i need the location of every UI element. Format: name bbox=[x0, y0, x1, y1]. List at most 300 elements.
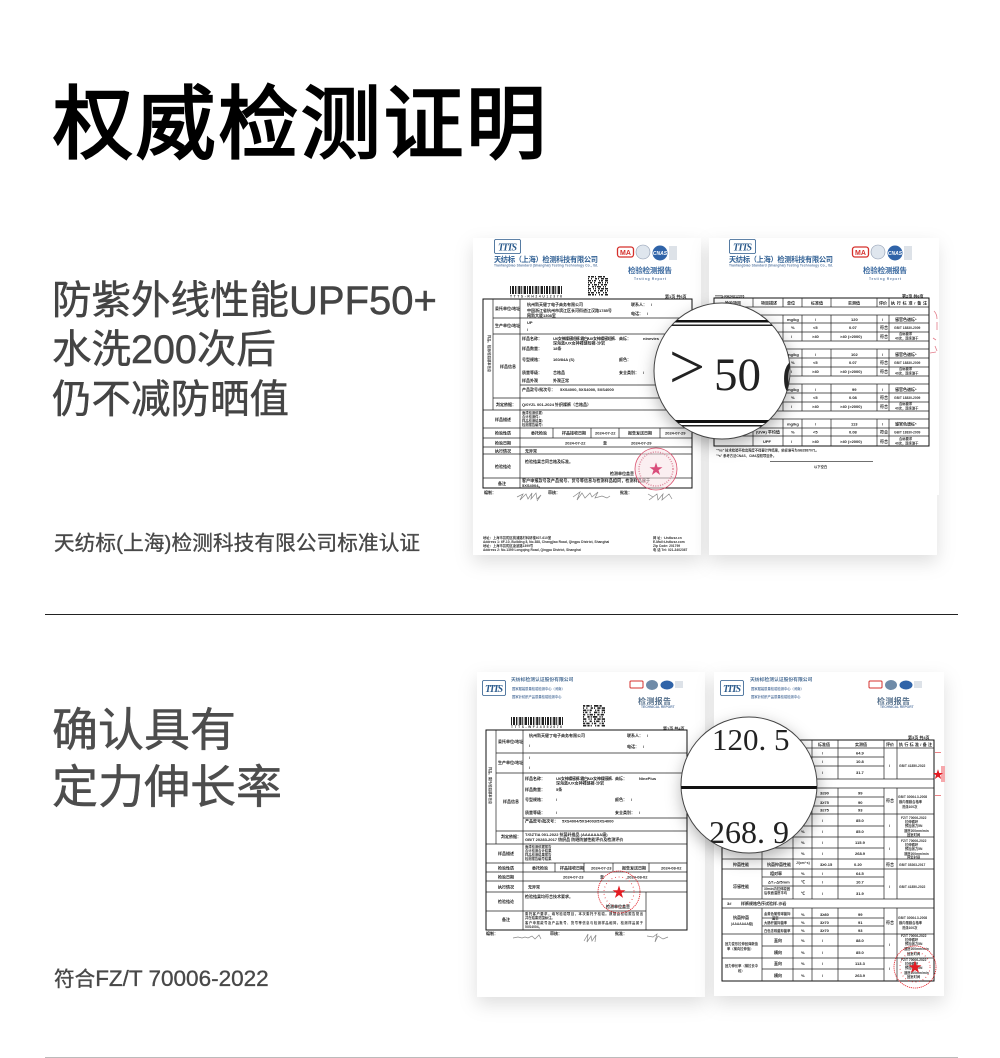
results table: 90 bbox=[858, 800, 863, 805]
results table: 感官色谱标* bbox=[895, 386, 917, 392]
report table: 检验日期 bbox=[495, 440, 511, 446]
address footer: 地址：上海市普陀区桃浦路村科研楼607-610室 bbox=[483, 535, 552, 540]
results table: 抗菌抑菌性能 bbox=[767, 861, 791, 867]
results table: FZ/T 70006-2022 bbox=[901, 934, 927, 938]
results table: <5 bbox=[813, 395, 818, 400]
results table: 直向 bbox=[774, 960, 782, 966]
results table: 3≥90 bbox=[820, 790, 830, 796]
results table: 3≥80 bbox=[820, 912, 830, 917]
report table: 执行情况 bbox=[498, 884, 514, 890]
results table bbox=[714, 298, 929, 446]
results table: / bbox=[815, 387, 817, 392]
results table: 金黄色葡萄球菌抑 bbox=[764, 911, 791, 916]
results table: 120 bbox=[851, 317, 858, 322]
report table: 判定依据： bbox=[501, 833, 521, 839]
results table: 回复时间 bbox=[907, 951, 921, 956]
report table: 样品名称： bbox=[525, 775, 545, 781]
report table: 2024-07-22 bbox=[565, 440, 586, 446]
report table: 联系人： / bbox=[627, 732, 649, 738]
address footer: Address 1: 6F-10, Building 8, No.388, Changjiao Road, Qingpu District, Shanghai bbox=[483, 540, 609, 544]
report table: / bbox=[529, 765, 531, 770]
results table: 99 bbox=[852, 387, 857, 392]
results table: >40 bbox=[812, 439, 820, 444]
report table: 质量等级： bbox=[525, 809, 545, 815]
signatures: 编制： bbox=[484, 489, 496, 495]
report table: ninevies bbox=[643, 336, 660, 341]
results table: 合标要求 bbox=[899, 331, 913, 336]
report heading bbox=[638, 696, 675, 709]
results table bbox=[722, 740, 934, 981]
results table: / bbox=[822, 829, 824, 834]
magnifier: UPF value bbox=[650, 303, 800, 439]
section 1: UV protection bbox=[52, 238, 939, 555]
report table: 5XS4004。 bbox=[525, 925, 542, 929]
results table: % bbox=[801, 928, 805, 933]
signatures: 批准： bbox=[615, 930, 627, 936]
results table: 实测值 bbox=[855, 741, 867, 747]
results table: 感官色谱标* bbox=[895, 420, 917, 426]
report table: 备注 bbox=[502, 916, 510, 922]
results table: 速度200mm/min bbox=[904, 946, 929, 951]
report table: 委托检验 bbox=[532, 864, 548, 870]
results table: 符合 bbox=[880, 403, 888, 409]
report table: 2024-07-29 bbox=[665, 430, 686, 436]
results table: 预加张力5N bbox=[905, 941, 923, 946]
results table: 3≥75 bbox=[820, 808, 830, 812]
results table: 样裤规格色序试验样-沙岩 bbox=[741, 900, 786, 906]
partial stamp bbox=[930, 311, 937, 353]
report table: 样品接收日期 bbox=[562, 430, 586, 436]
table footnotes: 以下空白 bbox=[814, 464, 827, 469]
results table: 合标要求 bbox=[899, 436, 913, 441]
report table: 备注 bbox=[498, 480, 506, 486]
stamp bbox=[635, 448, 677, 490]
report heading: 检验检测报告 bbox=[628, 265, 672, 275]
report table: 网新大厦1308室 bbox=[527, 312, 556, 318]
results table: 回力变形拉伸回弹数值 bbox=[725, 941, 759, 946]
report table: 质量等级： bbox=[522, 369, 542, 375]
results table: / bbox=[815, 352, 817, 357]
title: 权威检测证明 bbox=[53, 80, 546, 169]
panel: report page 4 bbox=[714, 672, 945, 996]
panel: report page 2: TTTS-RH24U12376 bbox=[715, 294, 744, 298]
address footer bbox=[483, 535, 688, 552]
report table: 18条 bbox=[553, 345, 561, 351]
results table: 93 bbox=[858, 808, 863, 812]
report table: GB/T 20283-2017 纺织品 防晒防皱性能评价及检测评价 bbox=[525, 836, 623, 842]
company name bbox=[511, 676, 574, 699]
report table: 检测报告编号结果 bbox=[525, 856, 552, 861]
results table: 符合 bbox=[886, 861, 894, 867]
report heading: Testing Report bbox=[869, 277, 902, 281]
results table: 抑菌性能 bbox=[733, 861, 749, 867]
results table: / bbox=[822, 750, 824, 756]
results table: % bbox=[801, 973, 805, 978]
report table: 面漆检测依据： bbox=[522, 410, 545, 415]
results table: FZ/T 70006-2022 bbox=[901, 958, 927, 962]
results table: % bbox=[801, 961, 805, 966]
results table: GB/T 41850-2022 bbox=[899, 885, 926, 889]
results table: / bbox=[882, 317, 884, 322]
text block: UPF50+ claim: 防紫外线性能UPF50+ bbox=[52, 279, 437, 323]
results table: 31.9 bbox=[856, 891, 865, 896]
report table: 颜色： bbox=[619, 356, 631, 362]
results table: 拉伸循环 bbox=[905, 937, 919, 942]
report table: 检验结果合同合格及标准。 bbox=[525, 458, 573, 464]
results table: 0.07 bbox=[849, 360, 858, 365]
report table: 检验日期 bbox=[498, 874, 514, 880]
address footer: Zip Code: 201799 bbox=[653, 544, 680, 548]
results table: 64.5 bbox=[856, 871, 865, 876]
results table: % bbox=[801, 851, 805, 856]
results table: / bbox=[822, 880, 824, 884]
report table: UP bbox=[527, 320, 533, 325]
report table: 2024-07-22 bbox=[595, 430, 616, 436]
report table: 2024-07-23 bbox=[591, 866, 612, 870]
results table: 85.0 bbox=[856, 950, 865, 955]
results table: 符合 bbox=[880, 368, 888, 374]
results table: GB/T 30064.3-2008 bbox=[898, 916, 927, 920]
stamp: ★ bbox=[649, 461, 663, 477]
accreditation logos: MA bbox=[855, 250, 866, 257]
results table: / bbox=[882, 387, 884, 392]
results table: % bbox=[791, 360, 795, 365]
company name bbox=[750, 676, 813, 699]
report table: 样品检测结果： bbox=[522, 418, 545, 423]
report table: 商标： bbox=[615, 775, 627, 781]
results table: >40 (>2000) bbox=[840, 404, 862, 409]
results table: / bbox=[889, 763, 891, 768]
results table: 113 bbox=[851, 422, 858, 426]
results table: / bbox=[822, 973, 824, 978]
magnifier: elongation values bbox=[680, 717, 820, 853]
section 2: stretch recovery bbox=[52, 672, 945, 997]
report table: 产品款号/批次号： bbox=[522, 386, 555, 392]
results table: % bbox=[791, 395, 795, 400]
report table: 样品、委托/检验基本信息 bbox=[488, 767, 493, 805]
company name: Tianfangbiao Standard (Shanghai) Testing Technology Co., ltd. bbox=[729, 264, 833, 268]
report table: / bbox=[527, 327, 529, 332]
results table: 回复时间 bbox=[907, 832, 921, 837]
results table: % bbox=[801, 950, 805, 955]
results table: mg/kg bbox=[787, 387, 799, 392]
report table: 合计检测合计结果 bbox=[525, 848, 552, 853]
results table: ΔT₁-Δ/5mm bbox=[768, 880, 790, 884]
results table: 段） bbox=[738, 968, 745, 973]
results table: GB/T 30064.3-2008 bbox=[898, 795, 927, 799]
results table: ℃ bbox=[801, 891, 805, 896]
results table: 评价 bbox=[879, 300, 887, 306]
report heading bbox=[628, 265, 672, 281]
results table: 感官色谱标* bbox=[895, 316, 917, 322]
barcode: TTTS-RH24U12376 bbox=[510, 294, 562, 298]
results table: 标准值 bbox=[811, 300, 823, 306]
results table: / bbox=[815, 422, 817, 426]
report table: 安全类别： / bbox=[619, 369, 645, 375]
company name: Tianfangbiao Standard (Shanghai) Testing Technology Co., ltd. bbox=[494, 264, 598, 268]
results table: / bbox=[822, 851, 824, 856]
divider bbox=[45, 614, 958, 615]
results table: / bbox=[822, 840, 824, 845]
report table bbox=[483, 299, 692, 488]
partial stamp: ★ bbox=[932, 769, 944, 781]
results table: 0.20 bbox=[854, 862, 863, 867]
report table: / bbox=[529, 755, 531, 760]
results table: FZ/T 70006-2022 bbox=[901, 816, 927, 820]
results table: 项目描述 bbox=[761, 300, 777, 306]
report table: 2024-08-02 bbox=[661, 866, 682, 870]
signatures: 批准： bbox=[620, 489, 632, 495]
results table: / bbox=[822, 818, 824, 823]
results table: 直向 bbox=[774, 937, 782, 943]
report table: / bbox=[529, 743, 531, 748]
results table: 合标要求 bbox=[899, 366, 913, 371]
report table: 杭州新天健丁电子商务有限公司 bbox=[527, 301, 583, 307]
address footer: E-Mail:t-tstbzzz.com bbox=[653, 540, 685, 544]
results table: 速度200mm/min bbox=[904, 970, 929, 975]
results table: / bbox=[822, 871, 824, 876]
accreditation logos: MA bbox=[620, 250, 631, 257]
signatures: 审核： bbox=[550, 930, 562, 936]
results table: 执行标准/备注 bbox=[891, 300, 927, 306]
panel: report page 4: 第3页 共4页 bbox=[908, 734, 930, 740]
address footer: Address 2: No.1399 Longqing Road, Qingpu District, Shanghai bbox=[483, 548, 581, 552]
stamp: ★ bbox=[612, 884, 626, 900]
address footer: 网 址：t-tstbzzz.cn bbox=[653, 535, 682, 540]
results table: 回复时间 bbox=[907, 974, 921, 979]
logo: TTTS: TTTS bbox=[485, 684, 503, 695]
report table: 2024-07-23 bbox=[563, 874, 584, 880]
results table: 3≥0.15 bbox=[820, 862, 833, 867]
results table: 3≥75 bbox=[820, 800, 830, 805]
results table: (UVA) 平均值 bbox=[756, 428, 780, 434]
report table: 委托客户要求，填写检验项目，本次委托于检验。数据由检验报告提出 bbox=[525, 911, 643, 916]
results table: 符合 bbox=[886, 797, 894, 803]
report table: 5XS4000, 5XS4000, 5XS4000 bbox=[560, 387, 615, 392]
results table: 抗菌抑菌 bbox=[733, 914, 749, 920]
report table: / bbox=[556, 797, 558, 802]
results table: % bbox=[801, 840, 805, 845]
certification note: 天纺标(上海)检测科技有限公司标准认证 bbox=[54, 532, 420, 555]
report table: 生产单位/地址 bbox=[498, 759, 523, 765]
results table: 洗涤100次 bbox=[902, 925, 918, 930]
results table: 预加张力5N bbox=[905, 965, 923, 970]
report table: 安全类别： / bbox=[615, 809, 641, 815]
company name: 天纺标检测认证股份有限公司 bbox=[750, 676, 813, 683]
results table: 回复时间 bbox=[907, 854, 921, 860]
report table: 2024-07-29 bbox=[631, 440, 652, 446]
report table: 5XS4004。 bbox=[522, 483, 542, 488]
results table: UPF bbox=[763, 439, 772, 444]
results table: 40次，连续测干 bbox=[895, 406, 919, 410]
results table: >40 bbox=[812, 369, 820, 374]
results table: 0.08 bbox=[849, 395, 858, 400]
panel: report page 3: 第1页 共4页 bbox=[663, 725, 685, 731]
results table: 符合 bbox=[880, 394, 888, 400]
report heading: 检测报告 bbox=[877, 696, 910, 706]
company name: 天纺标检测认证股份有限公司 bbox=[511, 676, 574, 683]
magnifier: UPF value: > bbox=[669, 331, 705, 402]
report table: 无异常 bbox=[528, 884, 540, 890]
results table: / bbox=[822, 938, 824, 943]
report table: / bbox=[556, 810, 558, 815]
logo: TTTS bbox=[720, 680, 744, 696]
text block: UPF50+ claim: 仍不减防晒值 bbox=[52, 378, 289, 422]
report table: 报告发送日期 bbox=[628, 430, 652, 436]
report table: 深海蓝/UX女神裸感短裤-沙岩 bbox=[553, 340, 605, 346]
results table: 实测值 bbox=[848, 300, 860, 306]
results table: 合标要求 bbox=[899, 401, 913, 406]
results table: / bbox=[822, 891, 824, 896]
results table: 菌率 bbox=[772, 916, 779, 920]
results table: % bbox=[791, 430, 795, 434]
report heading: TECHNICAL REPORT bbox=[641, 705, 675, 709]
report table: 样品检测结果报告 bbox=[525, 852, 552, 857]
results table: / bbox=[889, 823, 891, 828]
magnifier: UPF value: ( bbox=[782, 349, 798, 401]
results table: 99 bbox=[858, 790, 863, 796]
logo: TTTS: TTTS bbox=[723, 684, 741, 695]
partial stamp bbox=[932, 752, 945, 796]
results table: 执行标准/备注 bbox=[899, 741, 932, 747]
report table: 商标： bbox=[619, 335, 631, 341]
table footnotes bbox=[716, 448, 873, 469]
report table: 号型规格： bbox=[522, 356, 542, 362]
results table: 符合 bbox=[880, 438, 888, 444]
report table: 检测单位盖章 bbox=[606, 903, 630, 909]
report table: 联系人： / bbox=[631, 301, 653, 307]
results table: / bbox=[822, 770, 824, 775]
results table: 3# bbox=[727, 901, 732, 906]
logo: TTTS bbox=[494, 240, 520, 254]
results table: / bbox=[889, 942, 891, 947]
results table: 横向 bbox=[774, 972, 782, 978]
report table: 检验结果均符合技术要求。 bbox=[525, 893, 573, 899]
report table: 样品数量： bbox=[522, 345, 542, 351]
results table: 40次，连续测干 bbox=[895, 336, 919, 340]
results table: (AAAAAAA级) bbox=[731, 921, 753, 926]
report table: 样品、检测/检验基本信息 bbox=[487, 335, 492, 373]
results table: >40 bbox=[812, 404, 820, 409]
results table: 85.0 bbox=[856, 829, 865, 834]
report table: 号型规格： bbox=[525, 796, 545, 802]
report table: 至 bbox=[600, 874, 604, 880]
results table: 回力伸长率（横拉长中 bbox=[725, 963, 758, 968]
results table: 40次，连续测干 bbox=[895, 370, 919, 376]
report table: 面漆检测依据报告 bbox=[525, 844, 552, 849]
results table: mg/kg bbox=[787, 317, 799, 322]
panel: report page 3 bbox=[477, 672, 705, 997]
results table: 0.08 bbox=[849, 430, 858, 434]
results table: / bbox=[822, 950, 824, 955]
results table: 99 bbox=[858, 912, 863, 917]
results table: 符合 bbox=[886, 919, 894, 925]
report table: NinePlus bbox=[639, 776, 657, 781]
results table: % bbox=[791, 325, 795, 330]
report table: 样品名称： bbox=[522, 335, 542, 341]
results table: mg/kg bbox=[787, 422, 799, 426]
report table: 委托单位/地址 bbox=[498, 738, 523, 744]
results table: / bbox=[882, 422, 884, 426]
accreditation logos: CNAS bbox=[888, 251, 903, 257]
report heading: Testing Report bbox=[634, 277, 667, 281]
table footnotes: "*s" 参考方法CNAS、CMA授权项目外。 bbox=[716, 453, 776, 458]
report heading: 检验检测报告 bbox=[863, 265, 907, 275]
results table: % bbox=[801, 920, 805, 925]
results table: GB/T 41850-2022 bbox=[899, 764, 926, 768]
results table: 检验项目 bbox=[725, 300, 741, 306]
company name: 国家针纺织产品质量检验检测中心 bbox=[751, 694, 801, 699]
report table: 委托检验 bbox=[531, 430, 547, 436]
results table: 符合 bbox=[880, 359, 888, 365]
results table: 预加张力5N bbox=[905, 846, 923, 851]
logo: TTTS: TTTS bbox=[733, 242, 752, 254]
results table: <5 bbox=[813, 360, 818, 365]
text block: UPF50+ claim bbox=[52, 279, 437, 422]
accreditation logos: CNAS bbox=[653, 251, 668, 257]
results table: / bbox=[791, 404, 793, 409]
report table: 颜色： / bbox=[615, 796, 633, 802]
results table: % bbox=[801, 912, 805, 917]
accreditation logos bbox=[618, 245, 677, 260]
report table: T/GZTIA 001-2022 抗菌纤维品 (AAAAAAA级) bbox=[525, 831, 608, 837]
text block: UPF50+ claim: 水洗200次后 bbox=[52, 328, 276, 372]
results table: 115.9 bbox=[855, 840, 866, 845]
report table: 判定依据： bbox=[496, 401, 516, 407]
panel: report page 2 bbox=[709, 238, 939, 555]
report table: 样品数量： bbox=[525, 786, 545, 792]
results table: 膜内覆膜合格率 bbox=[899, 920, 923, 925]
report table: 样品信息 bbox=[500, 363, 516, 369]
results table: 88.0 bbox=[856, 938, 865, 943]
report table: 检测单位盖章 bbox=[610, 470, 634, 476]
accreditation logos bbox=[869, 680, 922, 690]
results table: 拉伸循环 bbox=[905, 961, 919, 966]
results table: 10.8 bbox=[856, 759, 865, 764]
results table: % bbox=[801, 871, 805, 876]
report table: 样品描述 bbox=[495, 416, 511, 422]
report table: 深海蓝/UX女神裸感裤-沙岩 bbox=[556, 780, 604, 786]
report table: 客户申报款号及产品批号、货号等信息与检测样品相同，检测样品属于 bbox=[522, 477, 650, 483]
report table: 检测报告编号： bbox=[522, 422, 545, 427]
report table: 生产单位/地址 bbox=[495, 322, 520, 328]
report table: 合计检测件： bbox=[522, 414, 542, 419]
barcode bbox=[510, 290, 562, 298]
results table: 单位 bbox=[787, 300, 795, 306]
results table: 3≥70 bbox=[820, 928, 830, 933]
report table: 客户申报款号及产品批号、货号等信息与检测样品相同，检测样品属于 bbox=[525, 920, 644, 925]
results table: 64.9 bbox=[856, 750, 865, 756]
logo: TTTS bbox=[730, 240, 756, 254]
report table: 执行情况 bbox=[495, 448, 511, 454]
results table: <5 bbox=[813, 325, 818, 330]
panel: report page 1: 第1页 共6页 bbox=[665, 293, 687, 299]
report heading: 检测报告 bbox=[638, 696, 671, 706]
results table: 凉感性能 bbox=[733, 883, 749, 889]
stamp bbox=[894, 946, 936, 988]
results table: >40 (>2000) bbox=[840, 334, 862, 339]
report table: 检验性质 bbox=[495, 430, 511, 436]
report table: 检验结论 bbox=[495, 463, 511, 469]
stamp: ★ bbox=[908, 959, 922, 975]
text block: elongation claim bbox=[52, 704, 282, 813]
report table: UX女神裸感裤-霜白/UX女神裸感裤- bbox=[556, 775, 614, 781]
results table: 拉伸循环 bbox=[905, 819, 919, 824]
QR code bbox=[583, 706, 605, 726]
results table: 相对率 bbox=[770, 870, 782, 876]
panel: report page 2: 第2页 共6页 bbox=[902, 292, 924, 298]
report table: 合格品 bbox=[553, 369, 565, 375]
